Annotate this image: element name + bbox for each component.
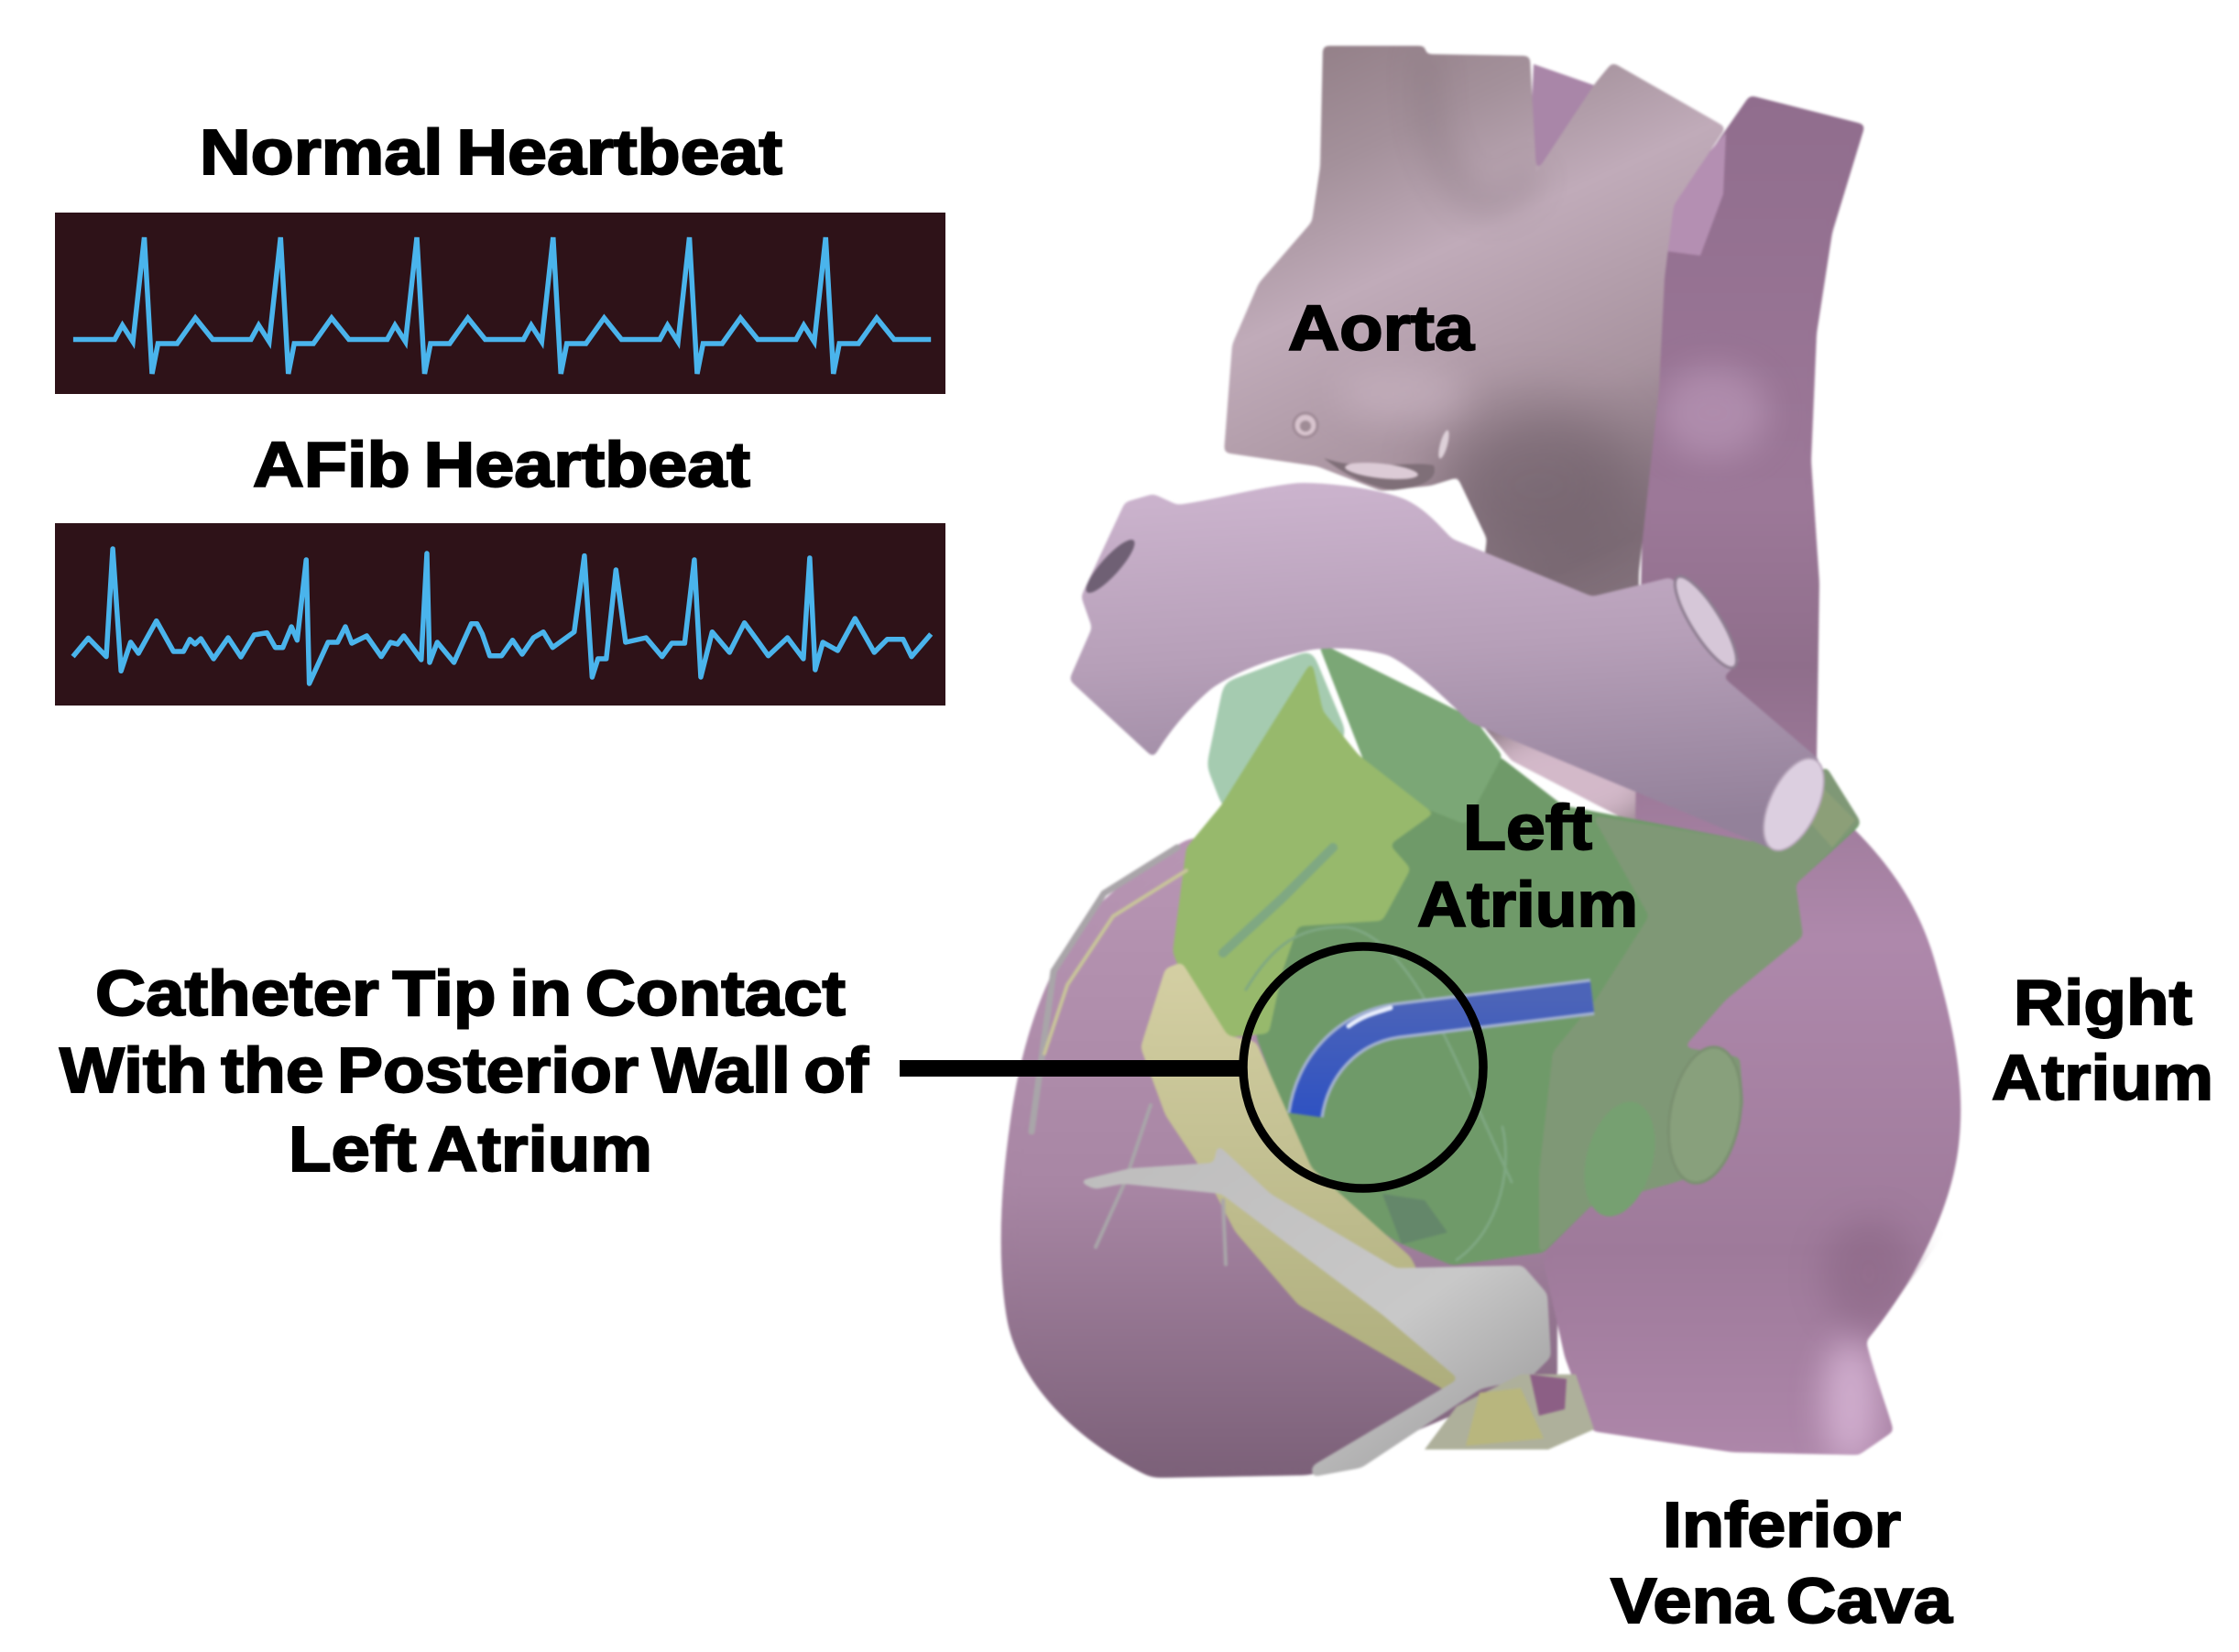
- panel: normal heartbeat ECG: [55, 213, 945, 394]
- left ventricle: [1001, 825, 1557, 1478]
- left atrium green body: [1256, 756, 1861, 1265]
- label: Inferior Vena Cava: Inferior: [1663, 1489, 1901, 1560]
- coronary sinus grey vein: [1077, 1144, 1551, 1477]
- pulmonary artery: [1069, 483, 1836, 859]
- aortic valve opening: [1324, 458, 1435, 490]
- callout text: catheter tip: With the Posterior Wall of: [60, 1034, 869, 1106]
- pale teal atrial appendage: [1207, 650, 1347, 811]
- callout text: catheter tip: [60, 957, 869, 1185]
- dark green band: [1317, 641, 1502, 825]
- callout leader line: [900, 1060, 1244, 1077]
- label: Inferior Vena Cava: [1611, 1489, 1953, 1636]
- callout text: catheter tip: Left Atrium: [289, 1113, 652, 1185]
- heading: AFib Heartbeat: AFib Heartbeat: [253, 429, 750, 500]
- coronary ostium: [1294, 413, 1317, 437]
- label: Right Atrium: [1992, 967, 2213, 1113]
- chart: AFib ECG trace: [73, 549, 931, 684]
- label: Aorta: Aorta: [1288, 292, 1475, 364]
- panel: AFib heartbeat ECG: [55, 523, 945, 706]
- illustration: 3D heart model: [1001, 46, 1960, 1478]
- aorta: [1224, 46, 1726, 834]
- lower valve cluster: [1425, 1374, 1594, 1450]
- heading: Normal Heartbeat: Normal Heartbeat: [200, 116, 782, 188]
- upper right pulmonary vein: [1658, 133, 1726, 256]
- pulmonary veins behind aorta: [1528, 64, 1612, 183]
- catheter: [1305, 997, 1592, 1115]
- label: Right Atrium: Atrium: [1992, 1042, 2213, 1113]
- hatched valve wedge: [1382, 1194, 1447, 1244]
- chart: normal ECG trace: [73, 237, 931, 374]
- right atrium and superior vena cava: [1544, 95, 1960, 1466]
- label: Left Atrium (heart): [1417, 792, 1638, 940]
- label: Left Atrium (heart): Atrium: [1417, 869, 1638, 940]
- label: Left Atrium (heart): Left: [1463, 792, 1592, 863]
- yellow fat band: [1141, 962, 1467, 1395]
- callout circle: [1243, 946, 1483, 1188]
- thin grey vessels: [1032, 848, 1226, 1264]
- right-side grey-green atrium wall: [1539, 766, 1861, 1255]
- label: Right Atrium: Right: [2014, 967, 2192, 1038]
- callout text: catheter tip: Catheter Tip in Contact: [95, 957, 846, 1029]
- label: Inferior Vena Cava: Vena Cava: [1611, 1565, 1953, 1636]
- lime green appendage: [1173, 661, 1438, 1039]
- appendage inner vessels: [1223, 848, 1512, 1260]
